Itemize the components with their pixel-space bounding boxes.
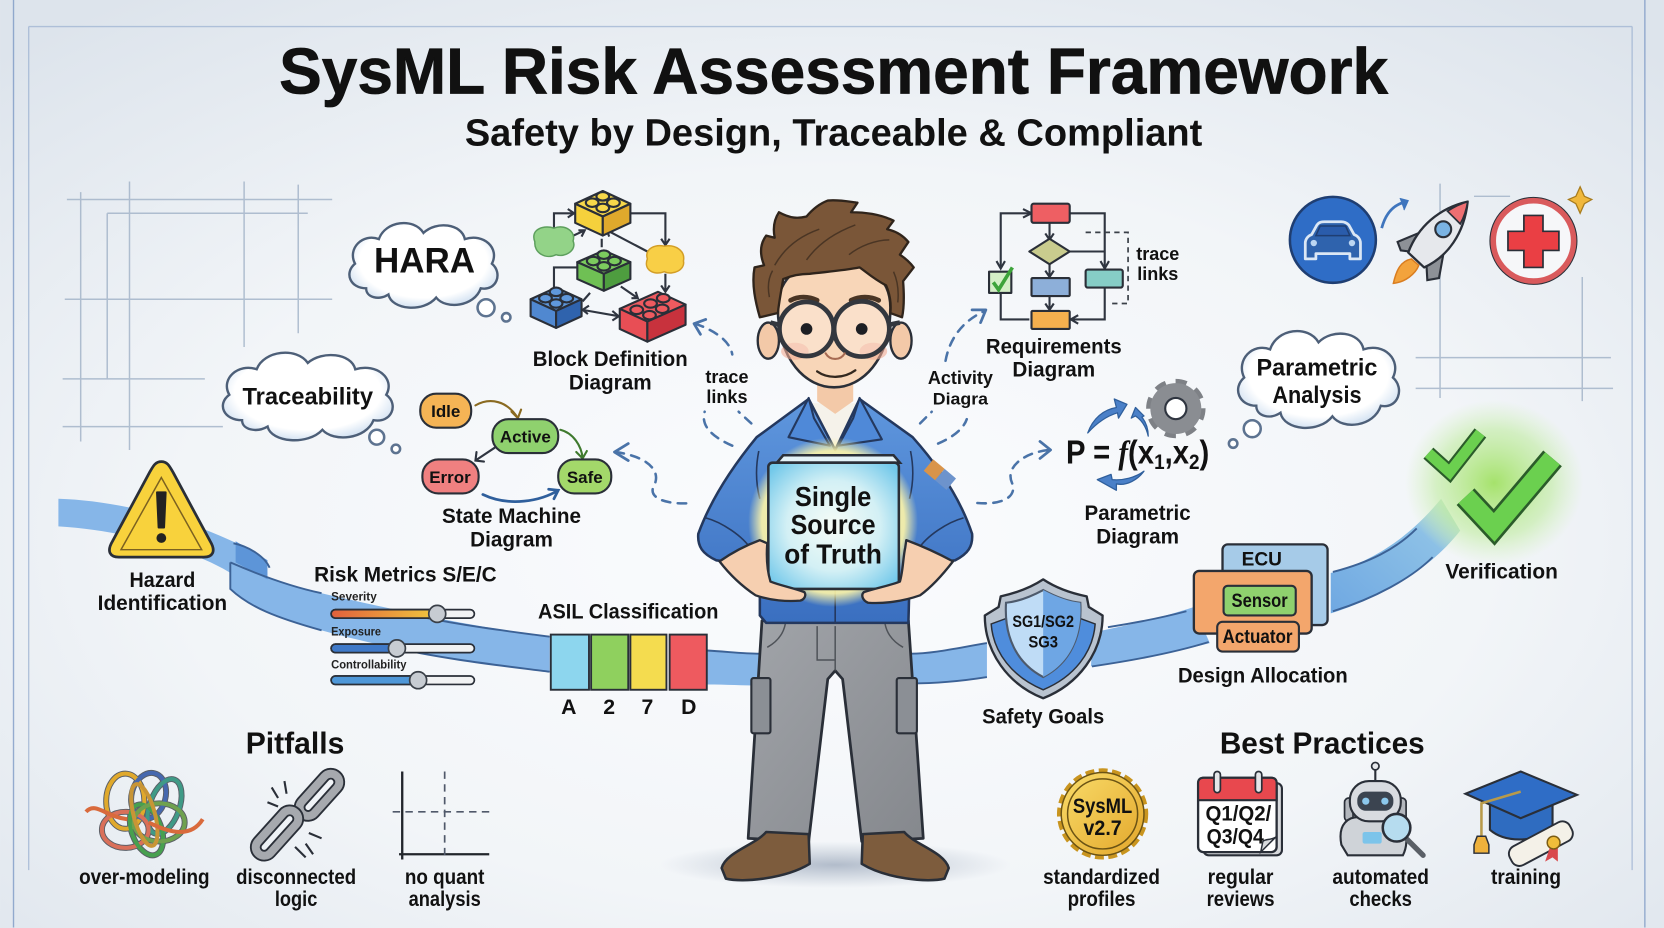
arrow: trace links to block definition: links [706,387,747,407]
arrow: trace links to block definition [694,319,751,446]
icon: car [1290,197,1376,283]
swoosh arrow [1382,202,1407,228]
glowing box: single source of truth: Single [795,481,871,512]
icon: red brick [620,292,686,342]
actuator: Actuator [1223,627,1293,648]
sleeve patch [924,459,956,490]
sensor: Sensor [1232,591,1288,612]
label: Requirements [986,335,1122,358]
glowing box: single source of truth: of Truth [784,538,882,569]
icon: rocket [1393,202,1468,283]
actuator [1217,622,1299,652]
hands [720,540,805,601]
ECU block: ECU [1242,550,1282,571]
icon: green brick [577,250,630,291]
label: no quant [405,866,484,889]
cloud: HARA: HARA [374,242,475,281]
label: training [1491,866,1561,889]
orange block [1032,311,1070,329]
state: Safe [558,459,611,493]
character: engineer [660,200,1010,888]
scale labels: A [561,696,576,719]
state machine diagram [420,394,611,552]
ASIL classification [538,601,718,719]
blue block [1032,278,1070,296]
red block [1032,204,1070,223]
slider: exposure: Exposure [331,626,381,639]
cloud: Parametric Analysis: Analysis [1272,382,1362,409]
glow [1405,400,1583,566]
heading: ASIL Classification [538,601,718,624]
orange module [1194,571,1312,634]
practice: regular reviews [1198,771,1282,911]
label: Block Definition [533,348,688,371]
blueprint grid left [63,181,332,450]
green check box [989,267,1012,293]
practice: regular reviews: reviews [1207,888,1275,911]
blueprint grid right [1416,184,1613,401]
title: SysML Risk Assessment Framework [279,34,1389,107]
slider: severity [331,591,474,622]
icon: graduation cap and diploma [1466,771,1577,869]
verification [1405,400,1583,583]
slider: exposure [331,626,474,657]
ASIL classification: D [681,696,696,719]
icon: yellow cloud node [646,246,684,273]
heading: Best Practices [1220,725,1425,760]
icon: sparkle [1568,187,1592,213]
connectors [554,209,670,320]
label: regular [1208,866,1273,889]
label: standardized [1043,866,1160,889]
icon: gear [1151,384,1200,433]
practice: standardized profiles [1043,773,1160,911]
icon: calendar [1198,771,1282,855]
icon: shield [985,579,1103,698]
design allocation [1178,544,1348,687]
cargo pockets [751,678,770,733]
decision diamond [1029,239,1070,264]
icon: seal badge [1061,773,1144,855]
block definition diagram: Diagram [569,371,652,394]
label: Parametric [1085,502,1191,525]
icon: shield: SG1/SG2 [1012,612,1074,631]
cloud: HARA [349,223,510,322]
label: Design Allocation [1178,664,1348,687]
state: Idle [420,394,471,428]
cycle arrows [1088,399,1148,490]
icon: empty chart [393,771,489,860]
icon: green cloud node [534,227,574,256]
requirements diagram: links [1137,264,1178,284]
nose and mouth [826,353,845,359]
icon: broken chain [252,770,343,859]
label: State Machine [442,505,581,528]
cloud: Traceability [223,353,400,453]
sensor [1224,586,1296,615]
face [778,260,890,387]
slider: controllability [331,659,474,689]
ECU block [1223,544,1328,625]
label: Hazard [130,569,195,592]
cloud: Parametric Analysis: Parametric [1256,355,1377,382]
formula: ) [1200,434,1209,471]
hazard identification [98,462,227,615]
risk metrics sliders [314,564,497,689]
parametric diagram: Diagram [1096,525,1179,548]
neck and tee [811,403,860,452]
practice: standardized profiles: profiles [1068,888,1135,911]
arrow: activity diagram to requirements: Diagra [933,389,989,408]
icon: large check [1466,458,1553,527]
practice: automated checks: checks [1349,888,1412,911]
pitfall: over-modeling [79,769,210,889]
pitfall: disconnected logic [236,770,356,911]
requirements diagram: Diagram [1012,359,1095,382]
shoes [722,832,810,880]
block definition diagram [531,191,688,394]
practice: training [1466,771,1577,889]
trousers [748,621,923,842]
pitfall: no quant analysis: analysis [409,888,481,911]
formula: 1 [1154,451,1165,474]
ASIL classification: 7 [641,696,653,719]
state machine diagram: Diagram [470,529,553,552]
pitfall: disconnected logic: logic [275,888,317,911]
icon: seal badge: SysML [1073,795,1132,818]
label: Safety Goals [982,706,1104,729]
formula: P = f(x [1066,434,1157,472]
hair [753,200,914,317]
arrow: trace links to block definition: trace [705,367,748,387]
best practices [1043,725,1577,911]
eyes [801,323,812,335]
heading: Risk Metrics S/E/C [314,564,497,587]
arrow: activity diagram to requirements [920,310,993,444]
cloud: Traceability: Traceability [243,383,373,410]
state: Error: Error [429,468,471,487]
icon: small check [1428,433,1480,472]
scale blocks [551,635,707,690]
label: automated [1332,866,1429,889]
subtitle: Safety by Design, Traceable & Compliant [465,111,1203,154]
slider: controllability: Controllability [331,659,407,672]
state: Safe: Safe [567,468,603,487]
shirt [698,399,972,623]
icon: tangle [86,769,203,860]
glowing box: single source of truth: Source [791,509,876,540]
icon: calendar: Q1/Q2/ [1206,802,1271,825]
glowing box: single source of truth [748,437,918,607]
connectors [996,209,1109,324]
slider: severity: Severity [331,591,377,604]
icon: calendar: Q3/Q4 [1207,826,1264,849]
state: Active: Active [500,428,551,447]
icon: robot [1341,762,1423,855]
domain icons [1290,187,1592,284]
state: Idle: Idle [431,402,460,421]
formula: ,x [1165,434,1190,471]
pitfalls [79,725,489,911]
icon: shield: SG3 [1028,632,1058,651]
heading: Pitfalls [246,725,344,760]
icon: blue brick [531,288,582,328]
icon: warning triangle [109,462,213,557]
icon: medical cross [1490,197,1577,284]
arrow: activity diagram to requirements: Activity [928,368,993,388]
state: Active [492,419,558,453]
ground shadow [660,842,1010,888]
arrow: to state machine [614,444,692,503]
teal block [1086,270,1123,288]
requirements diagram [986,204,1179,382]
icon: seal badge: v2.7 [1083,817,1122,840]
label: disconnected [236,866,356,889]
icon: yellow brick [575,191,630,236]
label: Verification [1445,560,1558,583]
eyebrows [791,297,879,300]
ASIL classification: 2 [603,696,615,719]
transitions [475,401,587,502]
formula: 2 [1189,451,1200,474]
hazard identification: Identification [98,592,227,615]
parametric diagram [1066,384,1209,548]
glasses [770,301,900,357]
safety goals [982,579,1104,729]
label: over-modeling [79,866,210,889]
state: Error [422,459,479,493]
pitfall: no quant analysis [393,771,489,911]
cloud: Parametric Analysis [1229,331,1399,448]
practice: automated checks [1332,762,1429,911]
process ribbon [58,499,1460,686]
trace links label: trace [1136,244,1179,264]
collar [788,398,830,446]
ears [758,323,779,359]
arrow: to parametric [977,441,1051,503]
